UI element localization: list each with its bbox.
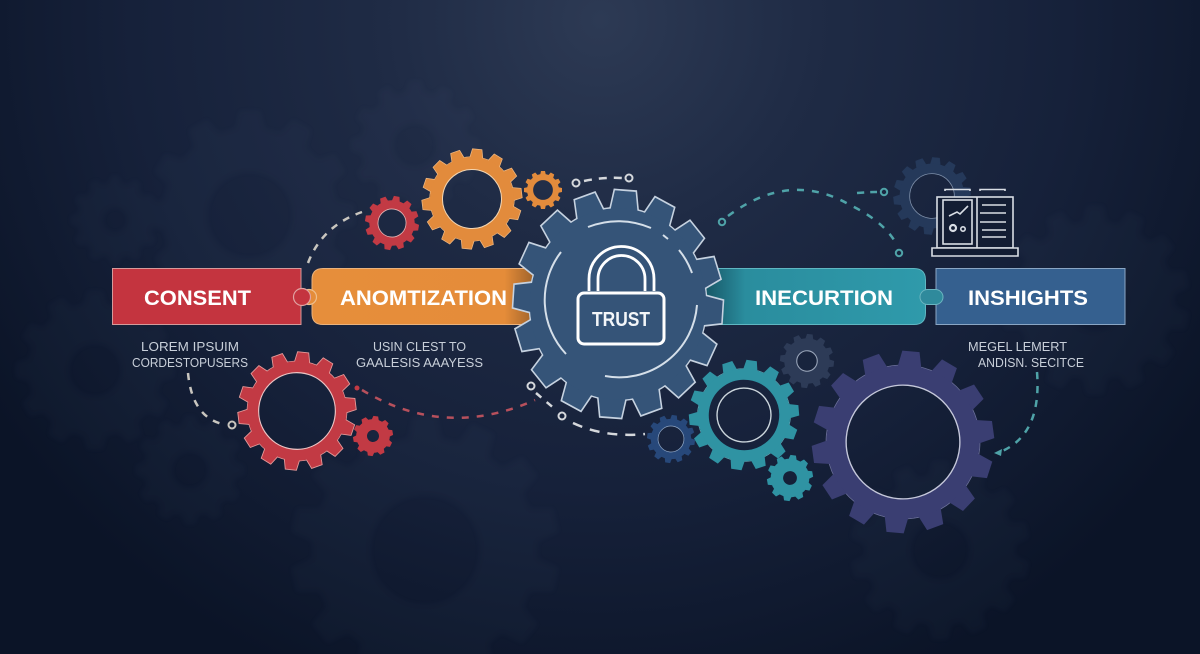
gear: tiny red (350, 413, 396, 459)
bar: consent: CONSENT (144, 287, 251, 310)
icon: report document (932, 190, 1018, 256)
bar: inecurtion: INECURTION (755, 287, 893, 310)
bar: anomtization (312, 268, 536, 324)
gear: small orange (524, 171, 562, 209)
gear: trust central gear (506, 182, 730, 426)
caption: anomtization (356, 339, 483, 370)
inner ring arcs (545, 221, 697, 377)
bar: inecurtion (700, 268, 926, 324)
icon: padlock (578, 247, 664, 344)
lock label: TRUST (592, 309, 650, 331)
gear: small blue (644, 412, 698, 466)
gear: large orange (417, 144, 527, 254)
dashed connector: top of trust gear (572, 174, 632, 186)
dashed connector: trust gear to blue gear (528, 382, 645, 435)
gear: large indigo (804, 343, 1002, 541)
caption: anomtization: USIN CLEST TO (373, 339, 466, 354)
bar: consent (112, 268, 301, 324)
dashed connector: red gear to trust gear (354, 386, 535, 418)
caption: insights: MEGEL LEMERT (968, 339, 1067, 354)
caption: insights: ANDISN. SECITCE (978, 355, 1084, 370)
dashed connector: consent to red gear (308, 212, 362, 263)
gear: large red (232, 346, 362, 476)
caption: anomtization: GAALESIS AAAYESS (356, 355, 483, 370)
caption: consent: LOREM IPSUIM (141, 339, 239, 354)
caption: insights (968, 339, 1084, 370)
dashed connector: teal arcs (719, 189, 902, 256)
gear: slate (777, 331, 837, 391)
gear: top right outline gear (889, 154, 975, 238)
connector: teal and blue node (920, 290, 943, 304)
gear: teal (682, 353, 806, 477)
bar: anomtization: ANOMTIZATION (340, 287, 507, 310)
connector: red and orange nodes (294, 288, 316, 306)
dashed connector: caption to ring (188, 373, 236, 428)
dashed connector: insights caption to indigo gear (994, 372, 1038, 456)
gear: small red (361, 192, 423, 254)
gear: small teal (764, 452, 816, 504)
caption: consent: CORDESTOPUSERS (132, 355, 248, 370)
caption: consent (132, 339, 248, 370)
bar: insights: INSHIGHTS (968, 287, 1088, 310)
bar: insights (936, 268, 1125, 324)
